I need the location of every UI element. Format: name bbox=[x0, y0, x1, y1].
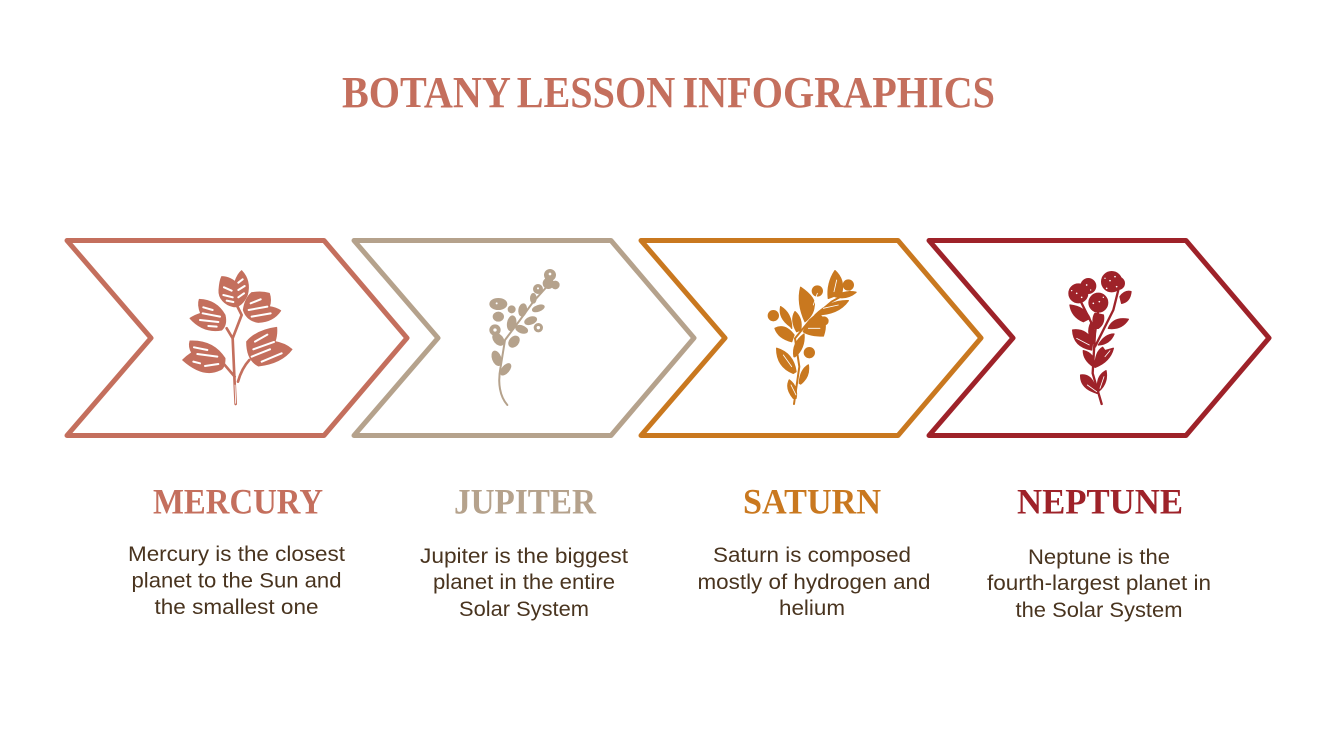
text block: mercury: Mercury is the closest bbox=[128, 542, 345, 566]
text block: mercury: the smallest one bbox=[154, 595, 318, 619]
text block: jupiter: Solar System bbox=[459, 597, 589, 621]
panel: saturn bbox=[641, 240, 981, 436]
panel: neptune bbox=[929, 240, 1269, 436]
arrow: neptune chevron bbox=[929, 240, 1269, 436]
text block: saturn: Saturn is composed bbox=[713, 543, 911, 567]
arrow: saturn chevron bbox=[641, 240, 981, 436]
arrow: jupiter chevron bbox=[354, 240, 694, 436]
text block: saturn: helium bbox=[779, 596, 845, 620]
text block: jupiter: Jupiter is the biggest bbox=[420, 544, 628, 568]
title: BOTANY LESSON INFOGRAPHICS bbox=[342, 68, 995, 117]
icon: mercury leafy branch bbox=[183, 271, 292, 404]
text block: jupiter bbox=[420, 544, 628, 621]
text block: neptune bbox=[987, 545, 1211, 622]
panel: jupiter bbox=[354, 240, 694, 436]
text block: saturn: mostly of hydrogen and bbox=[698, 570, 930, 594]
icon: neptune flower cluster bbox=[1069, 272, 1131, 404]
text block: mercury: planet to the Sun and bbox=[132, 568, 342, 592]
arrow: mercury chevron bbox=[67, 240, 407, 436]
text block: saturn bbox=[698, 543, 930, 620]
panel: mercury bbox=[67, 240, 407, 436]
text block: mercury bbox=[128, 542, 345, 619]
heading: neptune: NEPTUNE bbox=[1017, 482, 1183, 522]
heading: jupiter: JUPITER bbox=[454, 482, 597, 522]
text block: neptune: the Solar System bbox=[1016, 598, 1182, 622]
text block: jupiter: planet in the entire bbox=[433, 570, 615, 594]
icon: jupiter budding sprig bbox=[490, 270, 559, 405]
text block: neptune: fourth-largest planet in bbox=[987, 571, 1211, 595]
text block: neptune: Neptune is the bbox=[1028, 545, 1170, 569]
heading: saturn: SATURN bbox=[743, 482, 881, 522]
heading: mercury: MERCURY bbox=[153, 482, 323, 522]
icon: saturn flowering branch bbox=[768, 271, 856, 404]
